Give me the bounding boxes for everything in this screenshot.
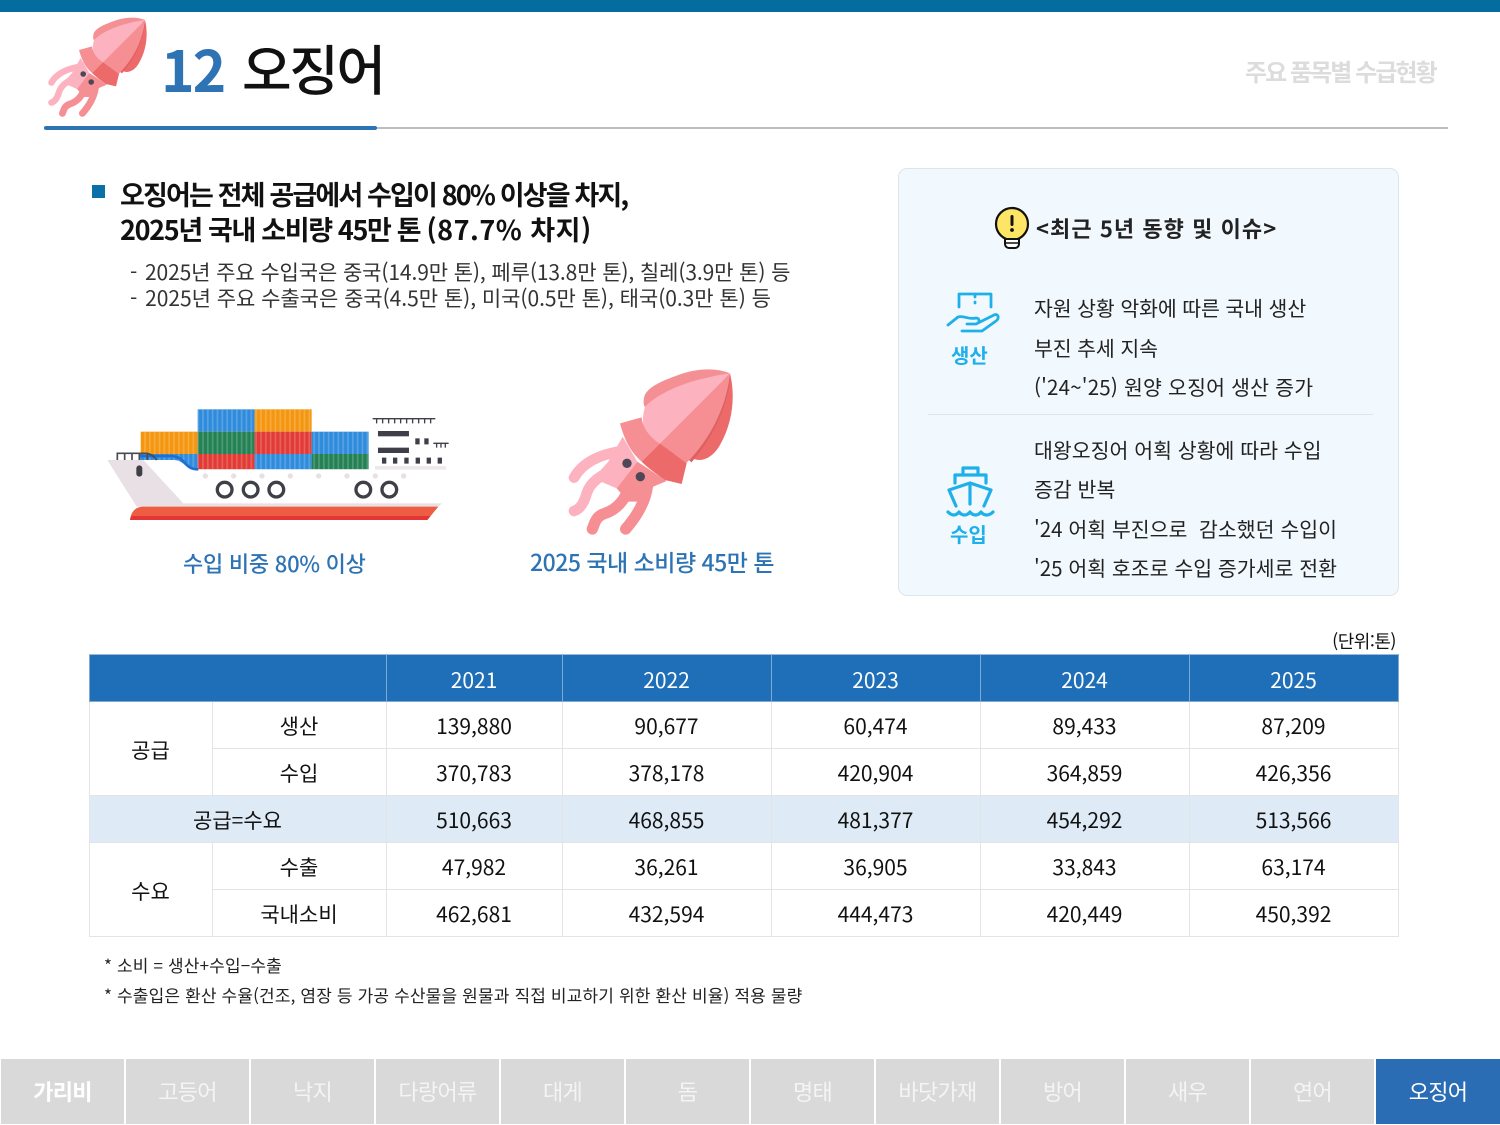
supply and demand table: 36,261 [634, 852, 699, 882]
bottom navigation: 낙지 [293, 1075, 332, 1107]
supply and demand table: 370,783 [436, 758, 512, 788]
footnotes [104, 952, 802, 1007]
supply and demand table: 454,292 [1047, 805, 1122, 835]
bottom navigation: 고등어 [158, 1075, 217, 1107]
supply and demand table: 444,473 [838, 899, 913, 929]
divider [928, 414, 1373, 415]
title: 오징어 [242, 27, 384, 106]
supply and demand table: 2023 [852, 665, 899, 695]
panel title: <최근 5년 동향 및 이슈> [1036, 212, 1277, 244]
bottom navigation: 다랑어류 [398, 1075, 477, 1107]
supply and demand table: 국내소비 [260, 899, 338, 929]
headline: 2025년 국내 소비량 45만 톤 (87.7% 차지) [120, 209, 592, 248]
import text: '24 어획 부진으로 감소했던 수입이 [1034, 513, 1337, 543]
icon: production [946, 292, 1000, 332]
footnotes: * 수출입은 환산 수율(건조, 염장 등 가공 수산물을 원물과 직접 비교하기 위한 환산 비율) 적용 물량 [104, 982, 802, 1007]
supply and demand table: 수입 [280, 758, 318, 788]
import text: '25 어획 호조로 수입 증가세로 전환 [1034, 552, 1337, 582]
squid caption: 2025 국내 소비량 45만 톤 [530, 544, 774, 578]
supply and demand table: 420,449 [1047, 899, 1122, 929]
top band [0, 0, 1500, 12]
bottom navigation: 가리비 [33, 1075, 92, 1107]
supply and demand table: 2024 [1061, 665, 1108, 695]
bullet [92, 185, 105, 198]
supply and demand table: 426,356 [1256, 758, 1331, 788]
section tag: 주요 품목별 수급현황 [1245, 53, 1436, 88]
icon: container ship [108, 409, 449, 520]
supply and demand table: 47,982 [442, 852, 506, 882]
icon: light bulb [994, 206, 1030, 249]
production text: 부진 추세 지속 [1034, 332, 1158, 362]
supply and demand table: 2021 [451, 665, 497, 695]
supply and demand table: 513,566 [1256, 805, 1331, 835]
icon: import ship [946, 466, 995, 517]
bottom navigation [1, 1059, 1500, 1124]
bottom navigation: 방어 [1043, 1075, 1082, 1107]
bottom navigation: 돔 [678, 1075, 697, 1107]
supply and demand table: 420,904 [838, 758, 913, 788]
supply and demand table: 33,843 [1052, 852, 1117, 882]
supply and demand table: 450,392 [1256, 899, 1331, 929]
supply and demand table: 수요 [131, 876, 170, 906]
bottom navigation: 바닷가재 [898, 1075, 977, 1107]
supply and demand table: 510,663 [436, 805, 512, 835]
import label: 수입 [950, 519, 987, 548]
supply and demand table: 수출 [280, 852, 318, 882]
supply and demand table: 139,880 [436, 711, 512, 741]
footnotes: * 소비 = 생산+수입−수출 [104, 952, 282, 977]
supply and demand table: 2022 [643, 665, 690, 695]
origin notes: - 2025년 주요 수출국은 중국(4.5만 톤), 미국(0.5만 톤), 태국(0.3만 톤) 등 [130, 283, 771, 313]
supply and demand table: 36,905 [843, 852, 908, 882]
supply and demand table: 432,594 [629, 899, 704, 929]
supply and demand table: 공급 [131, 734, 170, 764]
import text [1034, 434, 1337, 582]
supply and demand table: 공급=수요 [193, 805, 282, 835]
production text: 자원 상황 악화에 따른 국내 생산 [1034, 292, 1306, 322]
icon: header squid [48, 18, 147, 117]
bottom navigation: 명태 [793, 1075, 832, 1107]
headline [120, 174, 628, 248]
origin notes: - 2025년 주요 수입국은 중국(14.9만 톤), 페루(13.8만 톤), 칠레(3.9만 톤) 등 [130, 257, 790, 287]
header accent rule [44, 126, 377, 130]
supply and demand table: 2025 [1270, 665, 1317, 695]
unit note: (단위:톤) [1332, 628, 1396, 654]
bottom navigation: 오징어 [1409, 1075, 1467, 1107]
supply and demand table: 468,855 [629, 805, 704, 835]
header rule [44, 127, 1448, 129]
title number: 12 [161, 27, 224, 109]
supply and demand table: 462,681 [436, 899, 512, 929]
supply and demand table: 87,209 [1261, 711, 1326, 741]
icon: large squid [568, 369, 733, 535]
production label: 생산 [951, 340, 988, 369]
supply and demand table: 생산 [280, 711, 318, 741]
production text: ('24~'25) 원양 오징어 생산 증가 [1034, 371, 1313, 401]
bottom navigation: 연어 [1293, 1075, 1332, 1107]
origin notes [130, 257, 790, 313]
supply and demand table: 364,859 [1047, 758, 1122, 788]
panel: recent trends [898, 168, 1399, 596]
supply and demand table: 63,174 [1261, 852, 1326, 882]
import text: 증감 반복 [1034, 473, 1115, 503]
supply and demand table: 89,433 [1052, 711, 1117, 741]
supply and demand table: 378,178 [629, 758, 704, 788]
bottom navigation: 대게 [543, 1075, 582, 1107]
supply and demand table: 60,474 [843, 711, 908, 741]
production text [1034, 292, 1313, 401]
supply and demand table: 481,377 [838, 805, 913, 835]
supply and demand table: 90,677 [634, 711, 699, 741]
ship caption: 수입 비중 80% 이상 [183, 547, 366, 579]
bottom navigation: 새우 [1168, 1075, 1207, 1107]
import text: 대왕오징어 어획 상황에 따라 수입 [1034, 434, 1322, 464]
supply and demand table [89, 654, 1399, 937]
headline: 오징어는 전체 공급에서 수입이 80% 이상을 차지, [120, 174, 627, 213]
